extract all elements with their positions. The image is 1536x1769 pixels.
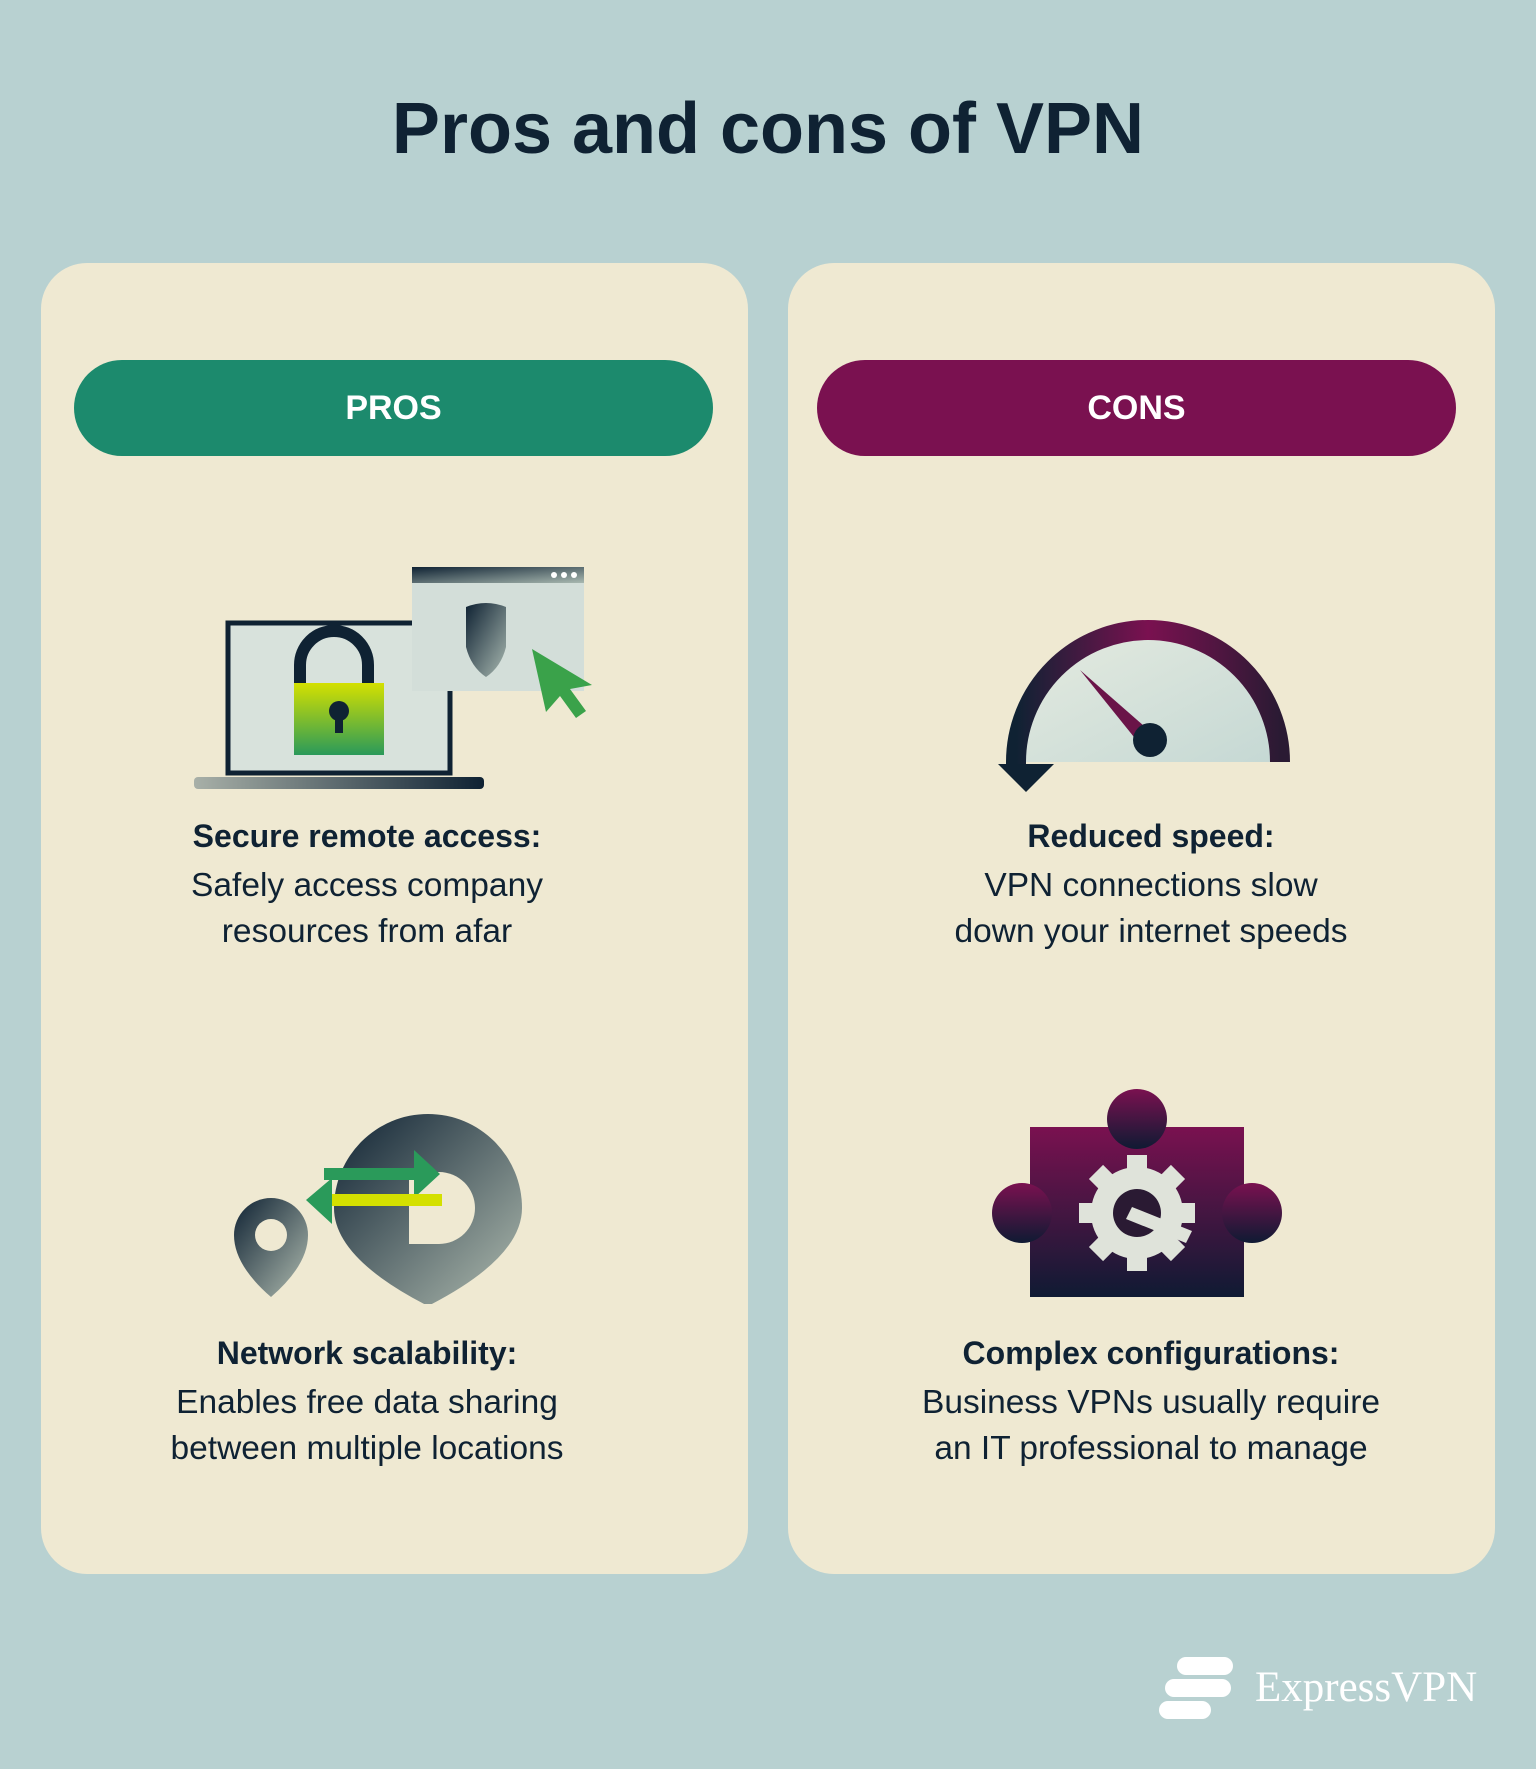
text: reduced speed: down your internet speeds [955,913,1347,950]
cons pill: CONS [1087,388,1186,426]
pros pill [74,360,713,456]
text: network scalability: Enables free data sharing [176,1384,558,1421]
icon: laptop with lock and shield [194,567,592,789]
logo: ExpressVPN [1159,1657,1477,1719]
icon: puzzle with gear [992,1089,1282,1297]
text: secure remote access [191,818,543,950]
text: network scalability: between multiple locations [171,1430,563,1467]
text: secure remote access: Secure remote access: [193,818,541,854]
panel: pros [41,263,748,1574]
text: complex configurations: an IT professional to manage [934,1430,1368,1467]
pros pill: PROS [345,388,442,426]
cons pill [817,360,1456,456]
text: network scalability [171,1335,563,1467]
text: network scalability: Network scalability: [217,1335,517,1371]
icon: location pins with arrows [234,1114,522,1304]
title: Pros and cons of VPN [392,89,1144,169]
text: complex configurations: Complex configurations: [963,1335,1339,1371]
text: reduced speed: VPN connections slow [984,867,1318,904]
logo: ExpressVPN: ExpressVPN [1255,1664,1477,1711]
text: secure remote access: resources from afar [222,913,512,950]
text: complex configurations: Business VPNs usually require [922,1384,1380,1421]
icon: speedometer [998,620,1290,792]
panel: cons [788,263,1495,1574]
text: complex configurations [922,1335,1380,1467]
text: reduced speed [955,818,1347,950]
text: secure remote access: Safely access company [191,867,543,904]
text: reduced speed: Reduced speed: [1027,818,1275,854]
